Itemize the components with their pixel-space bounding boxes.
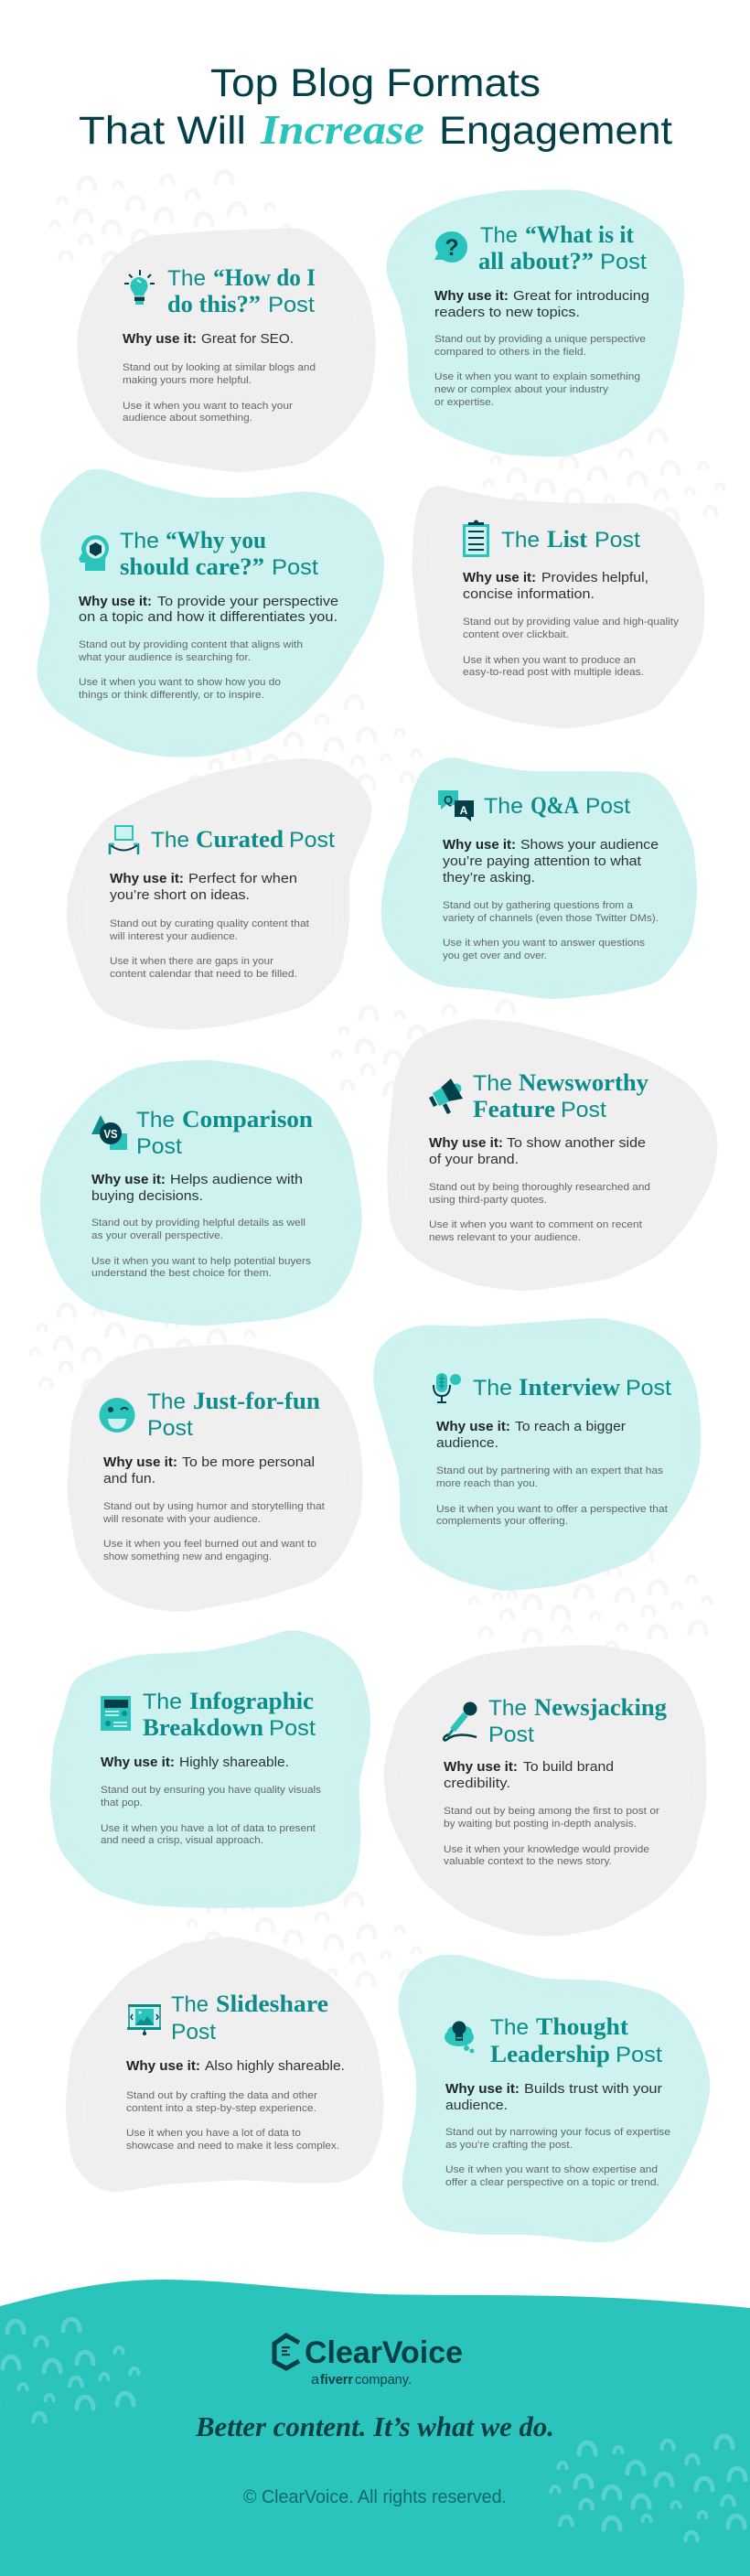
heading xyxy=(136,1106,314,1159)
why use it: Why use it: xyxy=(103,1455,177,1470)
blob background xyxy=(396,1954,712,2243)
heading: Post xyxy=(595,528,640,553)
heading: Thought xyxy=(536,2013,628,2040)
panel: curated post xyxy=(67,757,374,1030)
stand out text: variety of channels (even those Twitter DMs). xyxy=(443,913,659,924)
stand out text: more reach than you. xyxy=(436,1478,538,1489)
heading: The xyxy=(171,1992,209,2017)
stand out text: Stand out by providing content that aligns with xyxy=(79,639,303,650)
why use it xyxy=(436,1420,626,1451)
stand out text: what your audience is searching for. xyxy=(78,652,251,663)
why use it: Why use it: xyxy=(444,1760,518,1775)
panel: just for fun post xyxy=(67,1344,363,1613)
why use it xyxy=(110,872,297,903)
icon: question bubble: ? xyxy=(445,235,459,261)
heading: do this?” xyxy=(167,291,261,317)
blob background xyxy=(382,1645,707,1937)
stand out text: Stand out by ensuring you have quality visuals xyxy=(101,1785,322,1796)
use it when text: offer a clear perspective on a topic or trend. xyxy=(445,2177,659,2188)
use it when text: understand the best choice for them. xyxy=(91,1268,272,1279)
stand out text xyxy=(101,1785,322,1809)
panel: slideshare post xyxy=(65,1936,384,2194)
icon: microphone xyxy=(434,1373,461,1402)
heading: Post xyxy=(269,1716,316,1741)
blob background xyxy=(36,467,385,757)
copyright: © ClearVoice. All rights reserved. xyxy=(243,2487,507,2507)
why use it: Shows your audience xyxy=(520,838,659,853)
use it when text xyxy=(436,1504,668,1527)
heading: The xyxy=(120,529,159,553)
use it when text: Use it when you want to help potential buyers xyxy=(91,1256,312,1267)
why use it xyxy=(444,1760,614,1791)
icon: thought bubble with bulb xyxy=(445,2022,474,2053)
stand out text: Stand out by being thoroughly researched and xyxy=(429,1182,650,1193)
stand out text xyxy=(443,900,659,924)
why use it xyxy=(91,1173,303,1204)
stand out text xyxy=(429,1182,650,1206)
why use it xyxy=(79,595,338,625)
icon: handheld microphone xyxy=(444,1701,477,1740)
use it when text: Use it when you have a lot of data to xyxy=(126,2128,301,2139)
why use it: Great for introducing xyxy=(513,289,649,304)
why use it: Great for SEO. xyxy=(201,332,294,347)
heading xyxy=(488,1694,667,1747)
stand out text xyxy=(444,1806,659,1830)
background arch pattern xyxy=(31,171,724,1998)
heading xyxy=(501,526,640,553)
icon: Q and A bubbles xyxy=(438,790,474,821)
why use it: readers to new topics. xyxy=(434,306,580,320)
heading: Post xyxy=(616,2043,662,2067)
stand out text: content into a step-by-step experience. xyxy=(126,2103,316,2114)
use it when text: Use it when you want to comment on recent xyxy=(429,1219,642,1230)
blob background xyxy=(67,1344,363,1613)
logo: ClearVoice: fiverr xyxy=(320,2372,353,2388)
use it when text xyxy=(126,2128,339,2152)
icon: head with cube xyxy=(79,535,109,571)
why use it xyxy=(126,2059,345,2074)
why use it: you’re short on ideas. xyxy=(110,888,250,903)
why use it: Perfect for when xyxy=(188,872,297,886)
icon: Q and A bubbles: A xyxy=(460,804,468,817)
heading: The xyxy=(136,1108,175,1132)
heading: The xyxy=(490,2015,529,2040)
use it when text: Use it when you want to produce an xyxy=(463,655,636,666)
heading: Post xyxy=(136,1134,182,1159)
heading: Slideshare xyxy=(216,1991,328,2017)
why use it: Provides helpful, xyxy=(541,571,648,585)
why use it: To build brand xyxy=(523,1760,614,1775)
blob background xyxy=(49,1628,370,1908)
blob background xyxy=(387,1018,719,1292)
why use it: To be more personal xyxy=(182,1455,315,1470)
heading: Post xyxy=(585,794,630,819)
why use it: Why use it: xyxy=(126,2059,200,2074)
blob background xyxy=(67,757,374,1030)
use it when text: Use it when you want to offer a perspective that xyxy=(436,1504,668,1515)
stand out text xyxy=(436,1465,664,1489)
why use it xyxy=(429,1136,646,1167)
use it when text: and need a crisp, visual approach. xyxy=(101,1835,263,1846)
why use it: Why use it: xyxy=(91,1173,166,1187)
use it when text: complements your offering. xyxy=(436,1516,568,1527)
panel: infographic breakdown post xyxy=(49,1628,370,1908)
use it when text: Use it when you want to teach your xyxy=(123,401,293,412)
stand out text: Stand out by gathering questions from a xyxy=(443,900,634,911)
heading: should care?” xyxy=(120,553,264,580)
heading: Post xyxy=(561,1098,606,1122)
why use it: on a topic and how it differentiates you. xyxy=(79,610,338,625)
heading xyxy=(490,2013,662,2067)
footer band xyxy=(0,2280,750,2576)
why use it: Why use it: xyxy=(443,838,516,853)
why use it: Why use it: xyxy=(79,595,152,609)
heading xyxy=(171,1991,328,2045)
heading xyxy=(151,826,335,853)
use it when text: or expertise. xyxy=(434,397,494,408)
use it when text xyxy=(443,938,646,961)
heading: The xyxy=(501,528,540,553)
heading xyxy=(167,264,316,317)
stand out text: by waiting but posting in-depth analysis. xyxy=(444,1819,637,1830)
why use it: Why use it: xyxy=(445,2082,520,2097)
blob background xyxy=(412,482,705,729)
use it when text xyxy=(79,677,281,701)
heading: The xyxy=(167,266,206,291)
heading: “Why you xyxy=(166,527,266,553)
use it when text: easy-to-read post with multiple ideas. xyxy=(463,667,644,678)
logo: ClearVoice: company. xyxy=(355,2372,412,2388)
heading xyxy=(147,1388,321,1441)
use it when text: Use it when you want to show expertise and xyxy=(445,2164,658,2175)
heading: Just-for-fun xyxy=(193,1388,321,1414)
stand out text: compared to others in the field. xyxy=(434,347,586,358)
panel: interview post xyxy=(372,1317,701,1592)
heading: Post xyxy=(600,250,647,274)
stand out text: Stand out by providing a unique perspective xyxy=(434,334,646,345)
use it when text: audience about something. xyxy=(123,413,252,424)
heading: Curated xyxy=(196,826,284,853)
heading: Comparison xyxy=(182,1106,314,1132)
why use it: Why use it: xyxy=(463,571,536,585)
panel: comparison post xyxy=(39,1059,362,1326)
heading: Post xyxy=(488,1723,534,1747)
heading: Leadership xyxy=(490,2041,610,2067)
heading: all about?” xyxy=(478,248,594,274)
why use it: Why use it: xyxy=(436,1420,510,1434)
blob background xyxy=(77,228,376,473)
stand out text xyxy=(445,2127,670,2151)
logo: ClearVoice: ClearVoice xyxy=(305,2335,463,2370)
logo: ClearVoice: a xyxy=(311,2372,320,2388)
use it when text xyxy=(103,1539,316,1562)
why use it: To reach a bigger xyxy=(515,1420,626,1434)
heading: Newsjacking xyxy=(534,1694,667,1721)
heading: Infographic xyxy=(189,1688,314,1714)
heading: The xyxy=(480,223,518,248)
heading: The xyxy=(484,794,523,819)
use it when text: news relevant to your audience. xyxy=(429,1232,581,1243)
use it when text: Use it when you feel burned out and want to xyxy=(103,1539,316,1550)
use it when text: new or complex about your industry xyxy=(434,384,609,395)
why use it: Why use it: xyxy=(110,872,184,886)
why use it: Why use it: xyxy=(429,1136,503,1151)
stand out text xyxy=(126,2090,317,2114)
heading: The xyxy=(151,828,189,853)
icon: versus shapes: VS xyxy=(104,1127,118,1141)
heading: The xyxy=(143,1690,182,1714)
icon: versus shapes xyxy=(91,1115,127,1150)
icon: clipboard xyxy=(463,520,489,557)
blob background xyxy=(385,189,685,457)
panel: Q and A post xyxy=(380,755,698,1000)
why use it: buying decisions. xyxy=(91,1189,203,1204)
heading: Post xyxy=(289,828,335,853)
stand out text: that pop. xyxy=(101,1798,143,1809)
use it when text xyxy=(445,2164,659,2188)
why use it: credibility. xyxy=(444,1776,510,1791)
use it when text: Use it when there are gaps in your xyxy=(110,956,273,967)
use it when text: Use it when you have a lot of data to present xyxy=(101,1823,316,1834)
panel: how do I do this post xyxy=(77,228,376,473)
blob background xyxy=(372,1317,701,1592)
stand out text: will interest your audience. xyxy=(109,931,238,942)
stand out text xyxy=(91,1218,305,1241)
why use it: To show another side xyxy=(507,1136,646,1151)
stand out text: Stand out by being among the first to post or xyxy=(444,1806,659,1817)
use it when text: Use it when you want to answer questions xyxy=(443,938,646,949)
heading: Post xyxy=(171,2020,216,2045)
heading: “How do I xyxy=(213,264,316,291)
heading: Post xyxy=(626,1376,671,1401)
heading: Breakdown xyxy=(143,1714,264,1741)
stand out text: Stand out by providing value and high-quality xyxy=(463,617,680,628)
icon: light bulb xyxy=(124,270,155,305)
icon: winking face xyxy=(99,1398,135,1433)
panel: newsworthy feature post xyxy=(387,1018,719,1292)
use it when text xyxy=(444,1844,649,1867)
icon: question bubble xyxy=(434,231,467,263)
use it when text: valuable context to the news story. xyxy=(444,1856,612,1867)
why use it xyxy=(101,1755,289,1770)
stand out text: Stand out by curating quality content that xyxy=(110,918,309,929)
why use it: Builds trust with your xyxy=(524,2082,662,2097)
heading: List xyxy=(547,526,587,553)
icon: Q and A bubbles: Q xyxy=(444,793,453,807)
stand out text xyxy=(123,362,316,386)
why use it: Why use it: xyxy=(123,332,197,347)
stand out text xyxy=(109,918,309,942)
heading xyxy=(473,1374,671,1401)
stand out text xyxy=(78,639,303,663)
use it when text: things or think differently, or to inspire. xyxy=(79,690,264,701)
use it when text: Use it when you want to explain something xyxy=(434,371,640,382)
why use it: and fun. xyxy=(103,1472,155,1487)
panel: why you should care post xyxy=(36,467,385,757)
heading: Post xyxy=(147,1416,193,1441)
why use it xyxy=(443,838,659,886)
use it when text xyxy=(463,655,644,678)
panel: what is it all about post xyxy=(385,189,685,457)
why use it: Why use it: xyxy=(434,289,509,304)
use it when text: showcase and need to make it less complex. xyxy=(126,2141,339,2152)
stand out text: Stand out by using humor and storytelling that xyxy=(103,1501,325,1512)
blob background xyxy=(39,1059,362,1326)
why use it xyxy=(123,332,294,347)
why use it xyxy=(463,571,648,602)
why use it xyxy=(434,289,649,320)
why use it: concise information. xyxy=(463,587,595,602)
use it when text xyxy=(91,1256,312,1279)
title: Top Blog Formats xyxy=(210,61,541,105)
title: That Will xyxy=(79,109,246,153)
heading xyxy=(484,792,630,819)
heading xyxy=(473,1069,648,1122)
stand out text xyxy=(434,334,646,358)
heading: Q&A xyxy=(530,792,579,819)
title: Increase xyxy=(260,106,424,153)
use it when text xyxy=(123,401,293,424)
why use it: you’re paying attention to what xyxy=(443,854,641,869)
icon: presentation screen xyxy=(127,2004,161,2035)
use it when text: show something new and engaging. xyxy=(103,1551,272,1562)
title: Engagement xyxy=(439,109,672,153)
heading: Feature xyxy=(473,1096,555,1122)
panel: list post xyxy=(412,482,705,729)
why use it: Helps audience with xyxy=(170,1173,303,1187)
use it when text xyxy=(110,956,297,980)
heading xyxy=(478,221,647,274)
why use it: of your brand. xyxy=(429,1153,519,1167)
blob background xyxy=(380,755,698,1000)
stand out text: Stand out by partnering with an expert that has xyxy=(436,1465,664,1476)
use it when text: Use it when your knowledge would provide xyxy=(444,1844,649,1855)
heading: The xyxy=(473,1071,512,1096)
stand out text: using third-party quotes. xyxy=(429,1195,547,1206)
title xyxy=(79,61,672,153)
heading xyxy=(143,1688,316,1741)
stand out text: as your overall perspective. xyxy=(91,1230,223,1241)
stand out text xyxy=(102,1501,325,1525)
stand out text: content over clickbait. xyxy=(463,629,569,640)
heading: The xyxy=(147,1390,186,1414)
use it when text: you get over and over. xyxy=(443,950,547,961)
why use it xyxy=(445,2082,662,2113)
stand out text: Stand out by looking at similar blogs and xyxy=(123,362,316,373)
footer arch patterns xyxy=(0,2319,750,2540)
why use it: Highly shareable. xyxy=(179,1755,289,1770)
why use it: To provide your perspective xyxy=(157,595,338,609)
stand out text: making yours more helpful. xyxy=(123,375,252,386)
heading: Post xyxy=(272,555,318,580)
icon: megaphone xyxy=(429,1079,463,1114)
stand out text: as you’re crafting the post. xyxy=(445,2140,573,2151)
stand out text: Stand out by narrowing your focus of expertise xyxy=(445,2127,670,2138)
heading: “What is it xyxy=(525,221,634,248)
why use it xyxy=(103,1455,315,1487)
tagline: Better content. It’s what we do. xyxy=(195,2410,554,2442)
stand out text: Stand out by providing helpful details as well xyxy=(91,1218,305,1229)
why use it: Also highly shareable. xyxy=(205,2059,345,2074)
use it when text: content calendar that need to be filled. xyxy=(110,969,297,980)
use it when text: Use it when you want to show how you do xyxy=(79,677,281,688)
use it when text xyxy=(434,371,640,408)
use it when text xyxy=(101,1823,316,1846)
heading: The xyxy=(488,1696,527,1721)
why use it: Why use it: xyxy=(101,1755,175,1770)
stand out text xyxy=(463,617,680,640)
blob background xyxy=(65,1936,384,2194)
panel: newsjacking post xyxy=(382,1645,707,1937)
use it when text xyxy=(429,1219,642,1243)
icon: infographic sheet xyxy=(101,1696,131,1731)
heading: Interview xyxy=(519,1374,620,1401)
why use it: audience. xyxy=(436,1436,498,1451)
heading xyxy=(120,527,318,580)
heading: Newsworthy xyxy=(519,1069,648,1096)
icon: framed art with rope xyxy=(110,826,138,854)
heading: Post xyxy=(268,293,315,317)
why use it: audience. xyxy=(445,2098,508,2113)
why use it: they’re asking. xyxy=(443,871,535,886)
stand out text: will resonate with your audience. xyxy=(102,1514,261,1525)
heading: The xyxy=(473,1376,512,1401)
stand out text: Stand out by crafting the data and other xyxy=(126,2090,317,2101)
logo: ClearVoice xyxy=(274,2335,463,2388)
panel: thought leadership post xyxy=(396,1954,712,2243)
